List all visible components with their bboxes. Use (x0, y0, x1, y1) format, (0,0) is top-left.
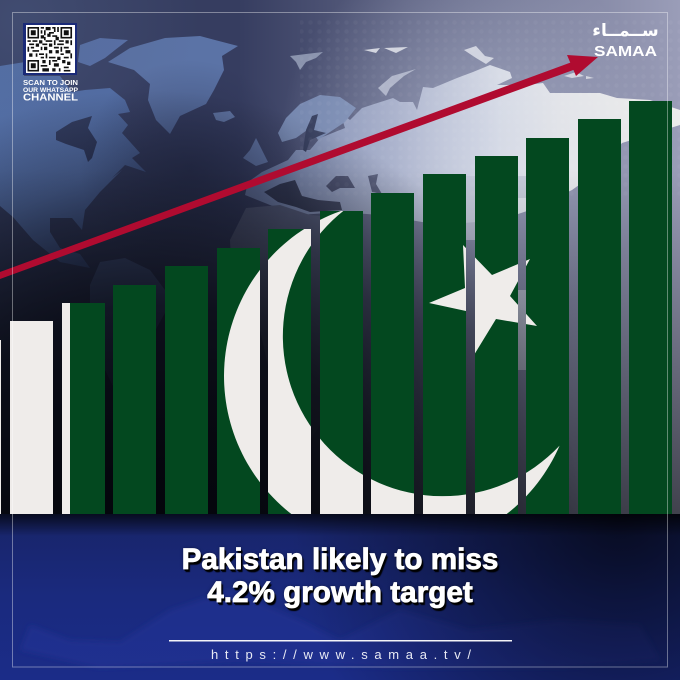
bar chart: Pakistan flag bars (0, 101, 672, 514)
map: Mediterranean (264, 180, 342, 212)
background (0, 0, 680, 516)
QR caption: SCAN TO JOIN (23, 78, 78, 87)
QR caption: OUR WHATSAPP (23, 88, 78, 94)
map: Britain (243, 138, 268, 166)
map: Svalbard (290, 52, 323, 70)
logo: Samaa (592, 21, 659, 60)
map: Baltic Sea (303, 114, 326, 152)
logo Urdu wordmark: ســمــاء (592, 21, 659, 41)
panel map silhouette (20, 590, 660, 668)
arrow shaft (0, 62, 576, 279)
background lighting (0, 0, 680, 516)
map: South America (90, 258, 172, 400)
bottom panel (0, 514, 680, 680)
arrow head (567, 55, 598, 76)
world map (0, 36, 680, 440)
arrow: growth trend (0, 55, 598, 279)
map: Scandinavia (278, 95, 356, 142)
QR caption: CHANNEL (23, 93, 78, 104)
flag hoist (0, 303, 70, 514)
flag crescent (224, 211, 560, 514)
headline (182, 543, 500, 612)
flag field (70, 90, 680, 520)
map: Africa (230, 205, 380, 440)
map: Black Sea (326, 176, 355, 192)
divider line (169, 640, 512, 642)
map: Novaya Zemlya (378, 69, 416, 96)
map: Caspian Sea (368, 174, 382, 194)
logo Latin wordmark: SAMAA (594, 43, 657, 60)
headline: Pakistan likely to miss (182, 543, 498, 576)
flag star (429, 245, 537, 355)
map: Greenland (108, 36, 238, 134)
QR modules (28, 27, 72, 72)
map: Iceland (213, 111, 235, 122)
map: Hudson Bay (56, 116, 97, 162)
QR code badge (23, 23, 77, 75)
website url: https://www.samaa.tv/ (211, 647, 471, 662)
map: Asia south patches (466, 176, 527, 370)
map: Ellesmere Island (78, 38, 128, 66)
QR caption (23, 78, 78, 104)
map: Eurasia (245, 65, 680, 225)
headline: 4.2% growth target (207, 576, 473, 609)
map: Arctic islands (364, 46, 594, 79)
map: North America (0, 62, 146, 268)
